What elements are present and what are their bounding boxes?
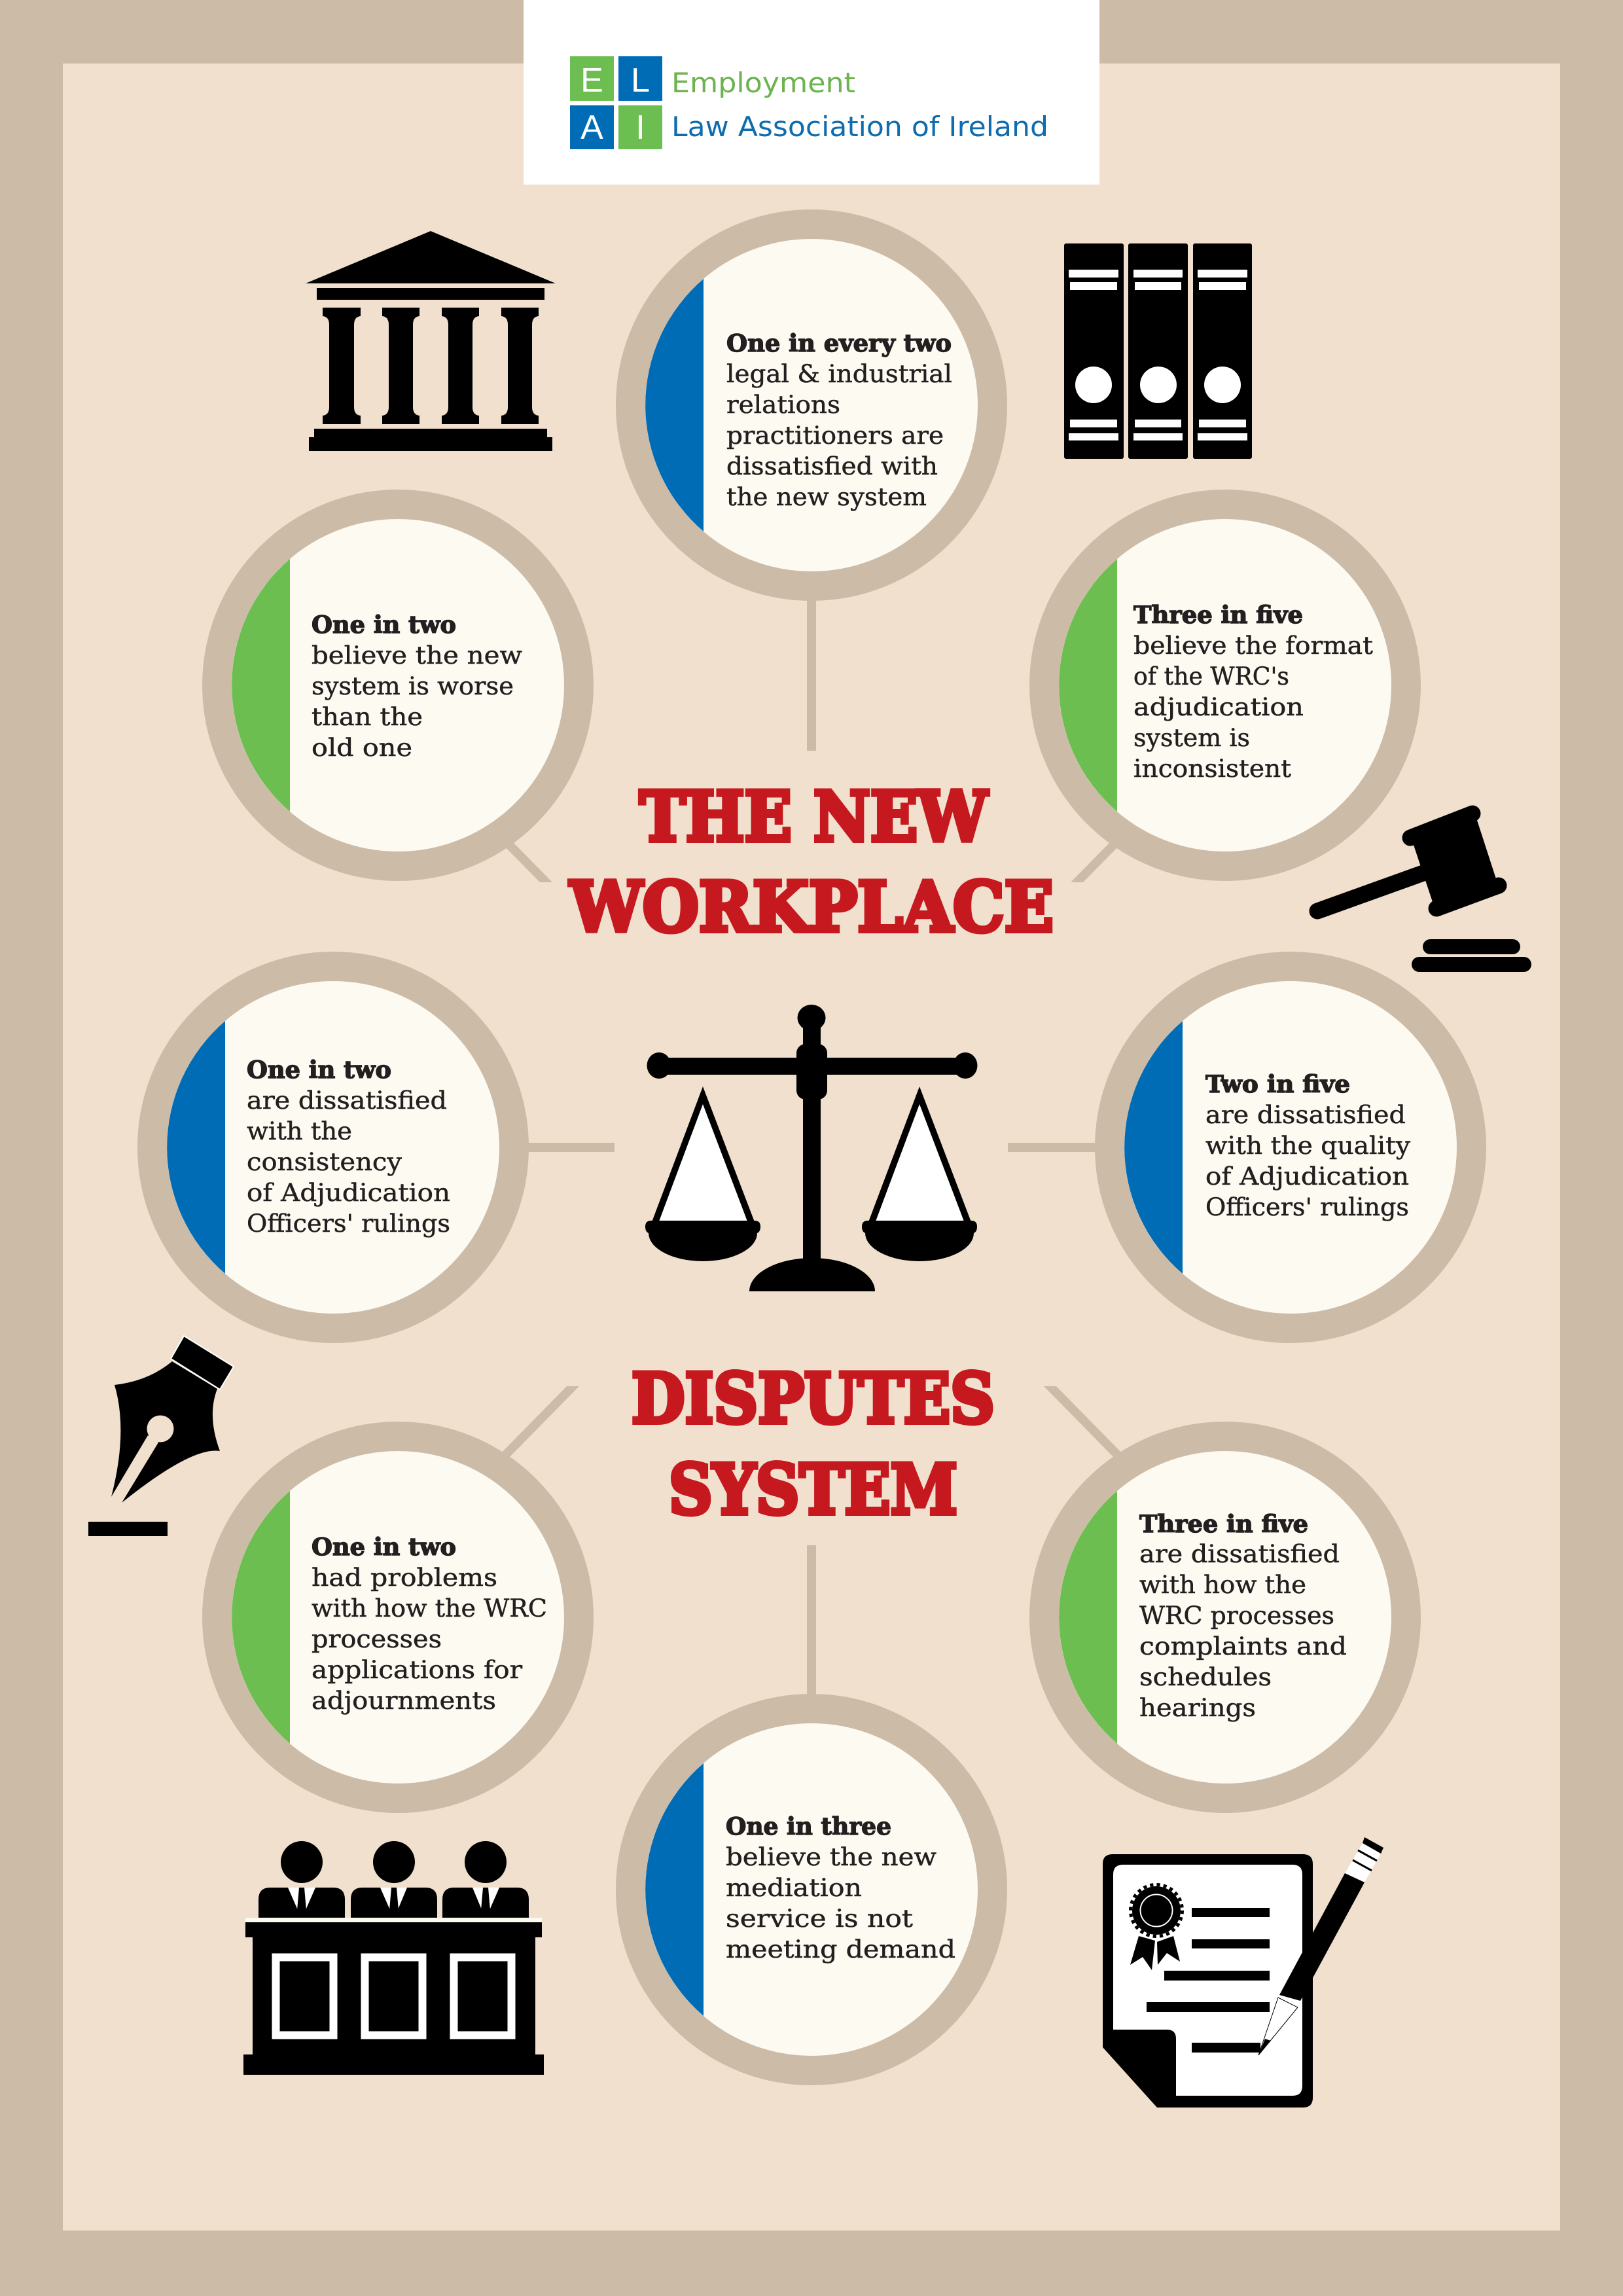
- panel: one in two consistency of rulings: are dissatisfied: [247, 1086, 447, 1115]
- panel: three in five format inconsistent: of the WRC's: [1133, 662, 1289, 691]
- panel: one in every two practitioners: [631, 224, 992, 586]
- panel: one in two worse than old: than the: [312, 703, 423, 731]
- panel: three in five format inconsistent: adjudication: [1133, 693, 1304, 721]
- panel: one in two worse than old: old one: [312, 734, 412, 762]
- panel: one in two consistency of rulings: [152, 966, 514, 1329]
- title: disputes system: DISPUTES: [632, 1357, 995, 1439]
- title: the new workplace: [569, 776, 1054, 948]
- icon: courthouse: [306, 231, 556, 451]
- panel: one in every two practitioners: legal & industrial: [726, 360, 952, 388]
- panel: three in five complaints and hearings: hearings: [1139, 1694, 1256, 1722]
- panel: one in three mediation: One in three: [726, 1813, 891, 1840]
- connector lines: [492, 589, 1131, 1702]
- panel: one in two consistency of rulings: One in two: [247, 1056, 391, 1084]
- panel: three in five complaints and hearings: WRC processes: [1139, 1602, 1334, 1630]
- panel: one in two consistency of rulings: of Adjudication: [247, 1179, 450, 1207]
- logo panel: I: [635, 109, 645, 147]
- panel: three in five complaints and hearings: Three in five: [1139, 1511, 1308, 1538]
- panel: two in five quality of rulings: are dissatisfied: [1205, 1101, 1406, 1129]
- panel: three in five complaints and hearings: complaints and: [1139, 1632, 1347, 1660]
- panel: one in every two practitioners: practitioners are: [726, 422, 944, 450]
- panel: one in two worse than old: system is worse: [312, 672, 514, 700]
- icon: scales of justice: [645, 1005, 978, 1291]
- panel: two in five quality of rulings: [1110, 966, 1471, 1329]
- panel: one in two consistency of rulings: consistency: [247, 1148, 402, 1176]
- panel: two in five quality of rulings: Two in five: [1205, 1071, 1350, 1098]
- panel: two in five quality of rulings: with the quality: [1205, 1132, 1410, 1160]
- panel: three in five format inconsistent: system is: [1133, 724, 1250, 752]
- panel: one in every two practitioners: One in every two: [726, 330, 952, 357]
- panel: one in two adjournments: adjournments: [312, 1687, 496, 1715]
- icon: signed certificate with pencil: [1103, 1837, 1383, 2108]
- logo panel: [524, 0, 1099, 185]
- panel: one in two worse than old: [217, 504, 579, 867]
- panel: three in five complaints and hearings: [1044, 1436, 1406, 1799]
- icon: fountain pen nib: [88, 1336, 234, 1536]
- panel: one in two adjournments: applications for: [312, 1656, 522, 1684]
- panel: one in three mediation: believe the new: [726, 1843, 936, 1871]
- panel: three in five format inconsistent: [1044, 504, 1406, 867]
- logo panel: Law Association of Ireland: [671, 111, 1048, 143]
- panel: one in two adjournments: processes: [312, 1625, 442, 1653]
- panel: two in five quality of rulings: Officers' rulings: [1205, 1193, 1409, 1221]
- panel: one in two worse than old: One in two: [312, 611, 456, 639]
- title: the new workplace: WORKPLACE: [569, 867, 1054, 948]
- panel: one in three mediation: [631, 1708, 992, 2071]
- panel: one in two consistency of rulings: with the: [247, 1117, 352, 1145]
- panel: one in two consistency of rulings: Officers' rulings: [247, 1210, 450, 1238]
- panel: one in every two practitioners: the new system: [726, 483, 927, 511]
- panel: three in five complaints and hearings: with how the: [1139, 1571, 1306, 1599]
- panel: one in two adjournments: One in two: [312, 1534, 456, 1561]
- icon: gavel: [1317, 814, 1531, 972]
- panel: three in five format inconsistent: believe the format: [1133, 632, 1373, 660]
- icon: binders: [1064, 243, 1252, 459]
- title: disputes system: [632, 1357, 995, 1530]
- panel: one in every two practitioners: relations: [726, 391, 840, 419]
- logo panel: E: [580, 62, 603, 99]
- panel: one in three mediation: service is not: [726, 1905, 913, 1933]
- panel: one in every two practitioners: dissatisfied with: [726, 452, 938, 480]
- title: the new workplace: THE NEW: [639, 776, 989, 857]
- panel: one in two adjournments: with how the WRC: [312, 1594, 547, 1623]
- panel: one in three mediation: meeting demand: [726, 1935, 955, 1964]
- logo panel: A: [580, 109, 603, 147]
- logo panel: L: [631, 62, 650, 99]
- panel: three in five format inconsistent: Three in five: [1133, 601, 1303, 629]
- panel: one in two adjournments: [217, 1436, 579, 1799]
- panel: three in five complaints and hearings: schedules: [1139, 1663, 1272, 1691]
- panel: one in three mediation: mediation: [726, 1874, 862, 1902]
- icon: tribunal panel at desk: [243, 1841, 544, 2075]
- panel: one in two adjournments: had problems: [312, 1564, 497, 1592]
- logo panel: Employment: [671, 67, 855, 99]
- panel: three in five complaints and hearings: are dissatisfied: [1139, 1540, 1340, 1568]
- panel: three in five format inconsistent: inconsistent: [1133, 755, 1291, 783]
- panel: two in five quality of rulings: of Adjudication: [1205, 1162, 1409, 1191]
- title: disputes system: SYSTEM: [669, 1449, 957, 1530]
- panel: one in two worse than old: believe the new: [312, 641, 522, 670]
